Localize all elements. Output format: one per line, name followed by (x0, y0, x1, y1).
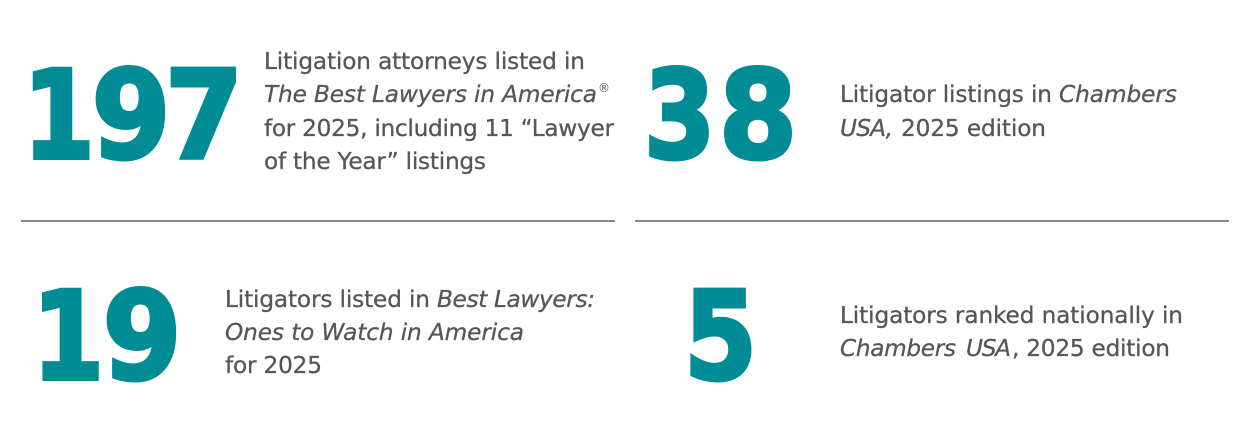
stat number: 197: 1 (23, 45, 95, 187)
text: 5 description: , 2025 edition (1012, 335, 1170, 362)
text: 19 description: for 2025 (225, 352, 322, 379)
text: 38 description: Chambers (1059, 81, 1177, 108)
text: 197 description: for 2025, including 11 “Lawyer (264, 115, 614, 142)
stat number: 19: 9 (103, 266, 182, 408)
text: 197 description: The Best Lawyers in America (264, 81, 597, 108)
stat number: 197: 9 (92, 45, 171, 187)
text: 5 description: Litigators ranked nationally in (840, 302, 1183, 329)
text: 5 description: Chambers (840, 335, 956, 362)
text: 38 description (840, 81, 1177, 142)
stat number: 197 (23, 45, 243, 187)
text: 38 description: USA, (840, 115, 893, 142)
text: 19 description: Best Lawyers: (437, 286, 595, 313)
stat number: 38 (644, 44, 797, 187)
text: 38 description: Litigator listings in (840, 81, 1052, 108)
stat number: 38: 3 (644, 44, 715, 187)
stat number: 197: 7 (165, 45, 243, 187)
text: 19 description: Ones to Watch in America (225, 319, 524, 346)
text: 197 description: of the Year” listings (264, 148, 486, 175)
stat number: 19 (32, 266, 182, 408)
text: 19 description: Litigators listed in (225, 286, 430, 313)
stat number: 19: 1 (32, 266, 104, 408)
stat number: 38: 8 (719, 45, 797, 187)
text: 5 description: USA (966, 335, 1011, 362)
text: 197 description: Litigation attorneys listed in (264, 48, 585, 75)
stat number: 5: 5 (684, 265, 757, 408)
text: 197 description: ® (598, 81, 610, 95)
text: 38 description: 2025 edition (901, 115, 1046, 142)
text: 5 description (840, 302, 1183, 362)
text: 19 description (225, 286, 595, 379)
text: 197 description (264, 48, 614, 175)
